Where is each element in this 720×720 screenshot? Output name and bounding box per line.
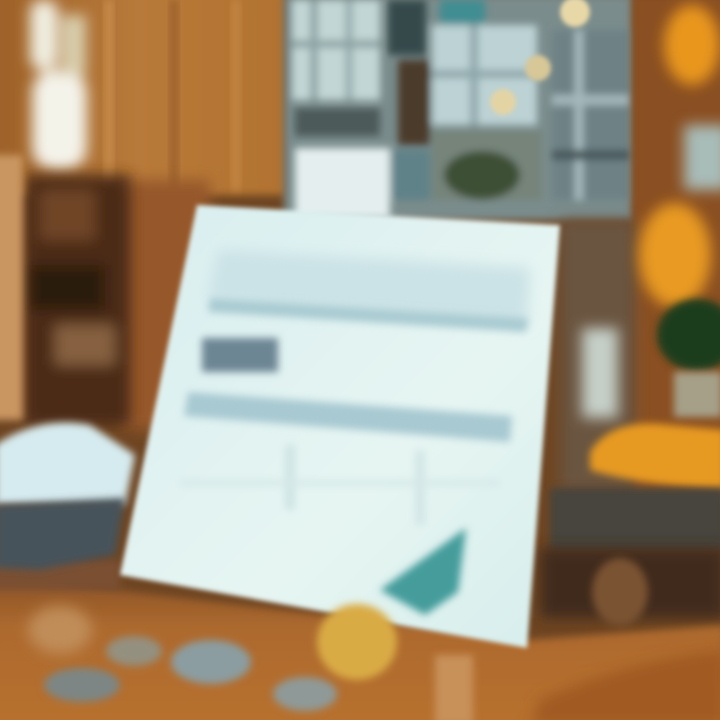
orange shelf <box>590 424 720 490</box>
wooden table <box>0 560 720 720</box>
left shelf <box>25 175 130 425</box>
window: top centre <box>284 0 634 220</box>
dark lower right cabinet <box>540 488 720 626</box>
header band: top <box>208 250 530 325</box>
right wall with lanterns <box>560 0 720 500</box>
stack of papers: left <box>0 422 135 570</box>
document sheet <box>120 205 560 648</box>
left column <box>0 155 23 420</box>
dark label block <box>202 338 278 372</box>
white wall light <box>30 0 87 170</box>
plant and pot <box>657 299 720 417</box>
teal corner fold <box>380 528 466 615</box>
lower table lines <box>180 445 500 525</box>
gold coin <box>317 604 397 680</box>
silver coins <box>44 636 337 711</box>
section band: middle <box>184 392 512 442</box>
